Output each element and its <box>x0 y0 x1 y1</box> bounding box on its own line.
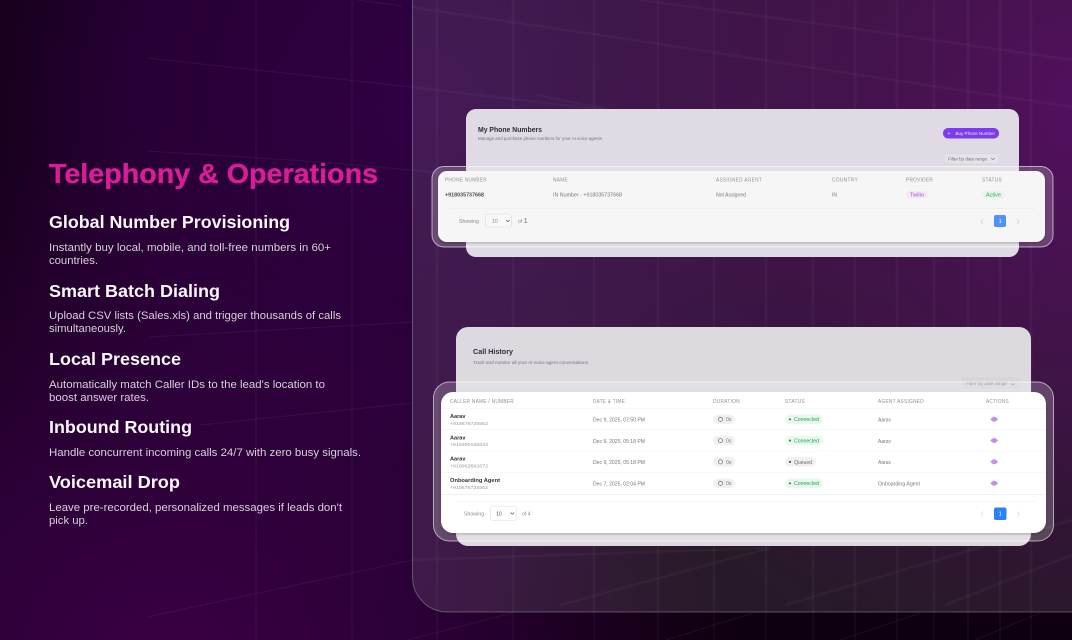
feature: Inbound Routing <box>49 417 361 459</box>
row: Aarav 2: Connected <box>794 438 819 444</box>
button: buy phone number: + <box>948 131 950 137</box>
row: Aarav 1: Dec 9, 2025, 07:50 PM <box>593 418 645 424</box>
panel: glass backdrop <box>412 0 1072 612</box>
feature: Smart Batch Dialing: Upload CSV lists (Sales.xls) and trigger thousands of calls <box>49 310 341 322</box>
table row: Not Assigned <box>716 192 746 198</box>
pagination <box>459 214 1019 227</box>
row: Onboarding Agent <box>450 478 998 491</box>
pagination <box>464 506 1020 520</box>
table header: STATUS <box>785 399 805 405</box>
table card: call history <box>441 392 1046 533</box>
row: Aarav 2: Aarav <box>878 439 891 445</box>
filter: date range: Filter by date range <box>966 381 1007 386</box>
row: Aarav 3: +919963592672 <box>450 463 488 469</box>
row: Aarav 2 <box>450 435 998 448</box>
table header: STATUS <box>982 178 1002 184</box>
feature list <box>49 212 361 527</box>
pagination: 10 <box>492 219 498 225</box>
pagination: 1 <box>999 219 1002 225</box>
feature: Global Number Provisioning <box>49 212 331 267</box>
row: Aarav 1: Connected <box>794 417 819 423</box>
title: Telephony & Operations <box>49 158 378 189</box>
row: Aarav 3 <box>450 457 998 469</box>
feature: Voicemail Drop: Voicemail Drop <box>49 472 180 492</box>
row: Aarav 3: Queued <box>794 460 812 466</box>
row: Aarav 2: Aarav <box>450 435 466 441</box>
button: buy phone number <box>943 128 999 138</box>
glass outline <box>434 382 1054 541</box>
pagination: of 1 <box>518 218 528 225</box>
row: Aarav 3: Aarav <box>450 457 466 463</box>
row: Aarav 1 <box>450 414 998 427</box>
filter: date range <box>962 378 1020 388</box>
panel: phone numbers screenshot <box>432 109 1053 257</box>
back card: call history <box>456 327 1031 546</box>
table header: DURATION <box>713 399 740 405</box>
table card: phone numbers <box>438 171 1045 242</box>
back card: call history: Track and monitor all your AI voice agent conversations <box>473 360 589 366</box>
table header: NAME <box>553 178 568 184</box>
pagination: 1 <box>999 512 1002 518</box>
table header: CALLER NAME / NUMBER <box>450 399 514 405</box>
pagination: Showing <box>464 511 484 517</box>
back card: call history: Call History <box>473 347 514 356</box>
table header: PROVIDER <box>906 178 933 184</box>
table row: Active <box>986 192 1001 198</box>
table header: ACTIONS <box>986 399 1009 405</box>
table row: Twilio <box>910 192 924 198</box>
feature: Voicemail Drop: pick up. <box>49 515 88 527</box>
table header: AGENT ASSIGNED <box>878 399 924 405</box>
feature: Global Number Provisioning: Global Number Provisioning <box>49 212 290 232</box>
table header <box>445 178 1002 184</box>
back card: my phone numbers: My Phone Numbers <box>478 127 542 134</box>
row: Onboarding Agent: Dec 7, 2025, 02:04 PM <box>593 482 645 488</box>
row: Aarav 3: 0s <box>726 460 732 466</box>
row: Aarav 1: +919676735562 <box>450 421 488 427</box>
table row: IN <box>832 192 837 198</box>
table header: PHONE NUMBER <box>445 178 487 184</box>
row: Aarav 1: 0s <box>726 417 732 423</box>
row: Aarav 1: Aarav <box>450 414 466 420</box>
row: Onboarding Agent: Onboarding Agent <box>450 478 500 484</box>
table row <box>445 191 1005 198</box>
row: Onboarding Agent: 0s <box>726 481 732 487</box>
pagination: Showing <box>459 219 479 225</box>
table header <box>450 399 1009 405</box>
back card: my phone numbers <box>466 109 1019 257</box>
feature: Smart Batch Dialing: Smart Batch Dialing <box>49 281 220 301</box>
row: Onboarding Agent: Onboarding Agent <box>878 482 921 488</box>
row: Aarav 3: Aarav <box>878 460 891 466</box>
table row: IN Number - +918035737668 <box>553 192 622 198</box>
table header: COUNTRY <box>832 178 858 184</box>
pagination: 10 <box>496 511 502 517</box>
feature: Local Presence <box>49 349 325 404</box>
row: Aarav 2: +919390165833 <box>450 442 488 448</box>
feature: Voicemail Drop <box>49 472 343 527</box>
feature: Voicemail Drop: Leave pre-recorded, personalized messages if leads don't <box>49 502 343 514</box>
row: Aarav 2: 0s <box>726 438 732 444</box>
feature: Local Presence: Automatically match Caller IDs to the lead's location to <box>49 379 325 391</box>
row: Aarav 2: Dec 9, 2025, 05:18 PM <box>593 439 645 445</box>
glass outline <box>432 166 1053 247</box>
table row: +918035737668 <box>445 192 484 198</box>
feature: Global Number Provisioning: countries. <box>49 255 98 267</box>
filter: date range <box>944 154 999 164</box>
feature: Smart Batch Dialing <box>49 281 341 335</box>
row: Onboarding Agent: Connected <box>794 481 819 487</box>
back card: my phone numbers: Manage and purchase phone numbers for your AI voice agents <box>478 136 603 141</box>
feature: Local Presence: boost answer rates. <box>49 392 149 404</box>
table header: ASSIGNED AGENT <box>716 178 762 184</box>
feature: Local Presence: Local Presence <box>49 349 181 369</box>
row: Aarav 1: Aarav <box>878 418 891 424</box>
button: buy phone number: Buy Phone Number <box>956 131 995 136</box>
table header: DATE & TIME <box>593 399 625 405</box>
feature: Smart Batch Dialing: simultaneously. <box>49 323 126 335</box>
filter: date range: Filter by date range <box>948 156 987 162</box>
feature: Inbound Routing: Handle concurrent incoming calls 24/7 with zero busy signals. <box>49 447 361 459</box>
panel: call history screenshot <box>434 327 1054 546</box>
feature: Inbound Routing: Inbound Routing <box>49 417 192 437</box>
row: Aarav 3: Dec 9, 2025, 05:18 PM <box>593 460 645 466</box>
row: Onboarding Agent: +919676735562 <box>450 485 488 491</box>
feature: Global Number Provisioning: Instantly buy local, mobile, and toll-free numbers in 60+ <box>49 242 331 254</box>
pagination: of 4 <box>522 511 531 517</box>
